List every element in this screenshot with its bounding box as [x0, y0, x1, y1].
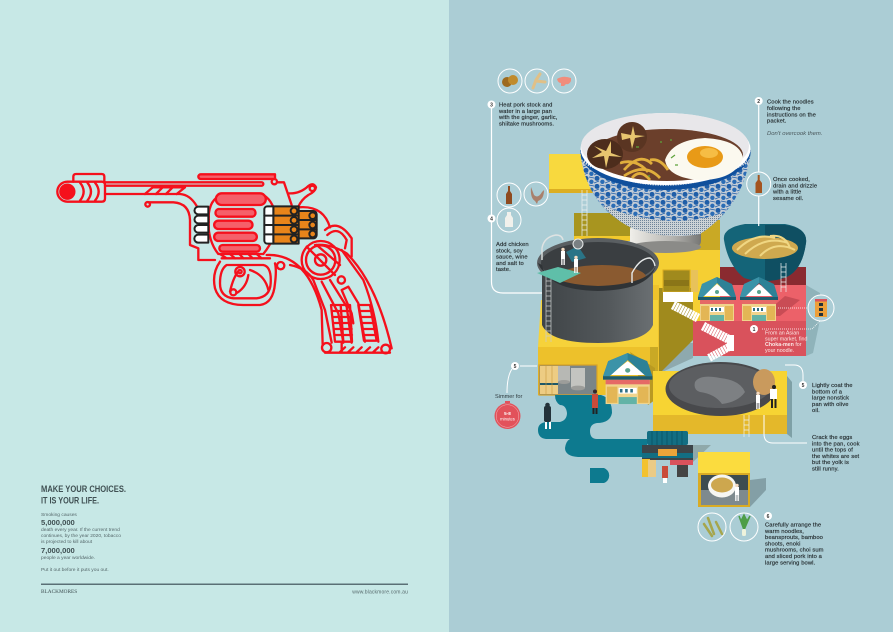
- icon: choi sum: [730, 513, 758, 541]
- ladder under pan: [744, 415, 749, 437]
- text block: smoking statistics: people a year worldwide.: [41, 555, 95, 561]
- illustration: yellow noodle kiosk: [698, 452, 766, 507]
- text block: smoking statistics: Smoking causes: [41, 512, 77, 518]
- step number 5 right: [799, 381, 807, 389]
- text: olive oil instructions: Lightly coat the: [812, 383, 853, 389]
- website address: www.blackmore.com.au: [352, 590, 408, 596]
- noodles: [620, 159, 668, 180]
- text: step 6 instructions: [764, 522, 824, 566]
- text: egg instructions: but the yolk is: [812, 460, 849, 466]
- text: sesame oil note: with a little: [772, 190, 801, 196]
- text: step 2 instructions: instructions on the: [767, 112, 816, 118]
- text: egg instructions: Crack the eggs: [812, 435, 852, 441]
- text: olive oil instructions: bottom of a: [812, 389, 843, 395]
- step number 2: 2: [757, 99, 760, 105]
- ladder beside pot: [546, 276, 551, 342]
- text: olive oil instructions: pan with olive: [812, 402, 849, 408]
- text: sesame oil note: [772, 177, 817, 202]
- step number 3: 3: [490, 102, 493, 108]
- text: chuka-men note: Choka-men for: [765, 342, 802, 348]
- step number 2: [755, 97, 763, 105]
- heading: make your choices: [41, 484, 126, 506]
- text: step 6 instructions: large serving bowl.: [765, 560, 816, 566]
- icon: wine bottle: [497, 183, 521, 207]
- step 1 dotted connectors: [762, 308, 820, 329]
- text: step 6 instructions: shoots, enoki: [765, 541, 800, 547]
- illustration: noodle bowl: [724, 224, 806, 281]
- text: chuka-men note: From an Asian: [765, 330, 799, 336]
- step number 5 right: 5: [802, 383, 805, 389]
- illustration: nonstick pan: [666, 362, 776, 416]
- step number 6: [764, 512, 772, 520]
- illustration: pot platform: [538, 300, 658, 395]
- text: step 2 instructions: Cook the noodles: [767, 100, 814, 106]
- footer rule: [41, 584, 408, 585]
- text: egg instructions: until the tops of: [812, 448, 853, 454]
- icon: red timer with minutes: minutes: [500, 416, 515, 422]
- step 5 right connector: [785, 365, 803, 381]
- step number 5 left: 5: [514, 364, 517, 370]
- text block: smoking statistics: continues, by the year 2020, tobacco: [41, 533, 121, 539]
- cigarettes right with orange filters: [264, 206, 317, 244]
- text: sesame oil note: sesame oil.: [773, 196, 804, 202]
- icon: mushrooms: [498, 69, 522, 93]
- text: olive oil instructions: large nonstick: [812, 396, 849, 402]
- icon: red timer with minutes: 5-8: [504, 411, 511, 416]
- ladder from bowl platform: [582, 190, 587, 236]
- cigarettes left: [194, 207, 208, 243]
- text: step 3 instructions: Heat pork stock and: [499, 102, 552, 108]
- illustration: yellow towers behind bowl: [549, 154, 720, 380]
- icon: rooster: [524, 182, 548, 206]
- icon: bamboo shoots: [698, 513, 726, 541]
- step number 1: [750, 325, 758, 333]
- step 2 connector line: [758, 105, 760, 226]
- ladder near noodle bowl: [781, 263, 786, 292]
- illustration: house on pot platform: [603, 352, 655, 405]
- icon: pork: [552, 69, 576, 93]
- heading: make your choices: IT IS YOUR LIFE.: [41, 496, 99, 506]
- step 3 connector line: [492, 108, 542, 293]
- text: step 3 instructions: with the ginger, garlic,: [498, 115, 558, 121]
- text: step 3 instructions: shiitake mushrooms.: [499, 121, 554, 127]
- icon: red timer with minutes: [494, 401, 520, 429]
- text block: smoking statistics: 7,000,000: [41, 546, 75, 555]
- text: step 2 instructions: [767, 100, 822, 137]
- text: step 4 instructions: and salt to: [496, 261, 524, 267]
- text: step 6 instructions: warm noodles,: [764, 529, 804, 535]
- illustration: decorated ramen bowl: [580, 113, 751, 253]
- text: egg instructions: [812, 435, 860, 472]
- text: step 4 instructions: sauce, wine: [496, 255, 528, 261]
- text: chuka-men note: super market, find: [765, 336, 807, 342]
- step number 5 left: [511, 362, 519, 370]
- icon: salt shaker: [497, 208, 521, 232]
- illustration: standing people: [544, 390, 598, 429]
- text: step 6 instructions: and sliced pork into a: [765, 554, 823, 560]
- text: step 2 instructions: packet.: [767, 119, 787, 125]
- icon: sesame oil bottle: [747, 172, 771, 196]
- cylinder: [208, 193, 276, 258]
- text: step 4 instructions: Add chicken: [496, 242, 529, 248]
- text block: smoking statistics: death every year. If the current trend: [41, 527, 120, 533]
- text: step 6 instructions: mushrooms, choi sum: [765, 548, 824, 554]
- egg: [665, 138, 743, 180]
- icon: ginger: [525, 69, 549, 93]
- step number 1: 1: [753, 327, 756, 333]
- illustration: teal liquid river: [538, 395, 647, 457]
- illustration: cooking pot: [537, 235, 659, 343]
- text: sesame oil note: drain and drizzle: [773, 183, 817, 189]
- illustration: revolver made of cigarettes: [57, 174, 392, 353]
- icon: chuka-men packet: [808, 295, 834, 321]
- text: egg instructions: into the pan, cook: [812, 441, 860, 447]
- text: step 6 instructions: beansprouts, bamboo: [765, 535, 823, 541]
- muzzle: [57, 174, 105, 202]
- trigger guard: [214, 262, 284, 305]
- panel: left background: [0, 0, 449, 632]
- text: egg instructions: the whites are set: [812, 454, 860, 460]
- text: chuka-men note: [765, 330, 807, 354]
- illustration: workers holding egg: [753, 369, 777, 409]
- logo: Blackmores: BLACKMORES: [41, 589, 77, 595]
- text block: smoking statistics: [41, 512, 121, 573]
- text: sesame oil note: Once cooked,: [773, 177, 810, 183]
- teal puddle: [590, 468, 609, 483]
- mushrooms: [587, 122, 647, 169]
- step 5 left connector: [507, 366, 537, 393]
- illustration: storefront window with drums: [539, 365, 597, 395]
- illustration: pink building: [693, 267, 820, 356]
- step number 6: 6: [767, 514, 770, 520]
- text: step 2 instructions: Don't overcook them.: [767, 131, 822, 137]
- step number 4: [488, 214, 496, 222]
- illustration: lower storefront: [642, 431, 711, 483]
- text: chuka-men note: your noodle.: [765, 348, 794, 354]
- text: step 3 instructions: [498, 102, 558, 127]
- text block: smoking statistics: is projected to kill about: [41, 539, 93, 545]
- text: step 6 instructions: Carefully arrange the: [765, 522, 821, 528]
- text: olive oil instructions: [812, 383, 853, 414]
- text: olive oil instructions: oil.: [812, 408, 820, 414]
- barrel and frame: [105, 174, 352, 260]
- step number 4: 4: [490, 216, 493, 222]
- text: simmer for: Simmer for: [495, 394, 522, 400]
- text: step 4 instructions: [496, 242, 529, 273]
- text: step 4 instructions: stock, soy: [496, 248, 523, 254]
- illustration: houses on pink building: [698, 277, 778, 321]
- grip: [267, 241, 392, 353]
- eggs connector: [764, 415, 807, 443]
- step number 3: [488, 100, 496, 108]
- illustration: pan platform: [653, 371, 792, 438]
- text: step 3 instructions: water in a large pan: [498, 109, 552, 115]
- illustration: workers on teal board: [537, 239, 586, 283]
- text block: smoking statistics: 5,000,000: [41, 518, 75, 527]
- illustration: white staircases: [663, 292, 734, 358]
- text: egg instructions: still runny.: [812, 466, 839, 472]
- text: step 4 instructions: taste.: [496, 267, 511, 273]
- panel: right background: [449, 0, 893, 632]
- heading: make your choices: MAKE YOUR CHOICES.: [41, 484, 126, 494]
- text block: smoking statistics: Put it out before it puts you out.: [41, 567, 109, 573]
- text: step 2 instructions: following the: [767, 106, 801, 112]
